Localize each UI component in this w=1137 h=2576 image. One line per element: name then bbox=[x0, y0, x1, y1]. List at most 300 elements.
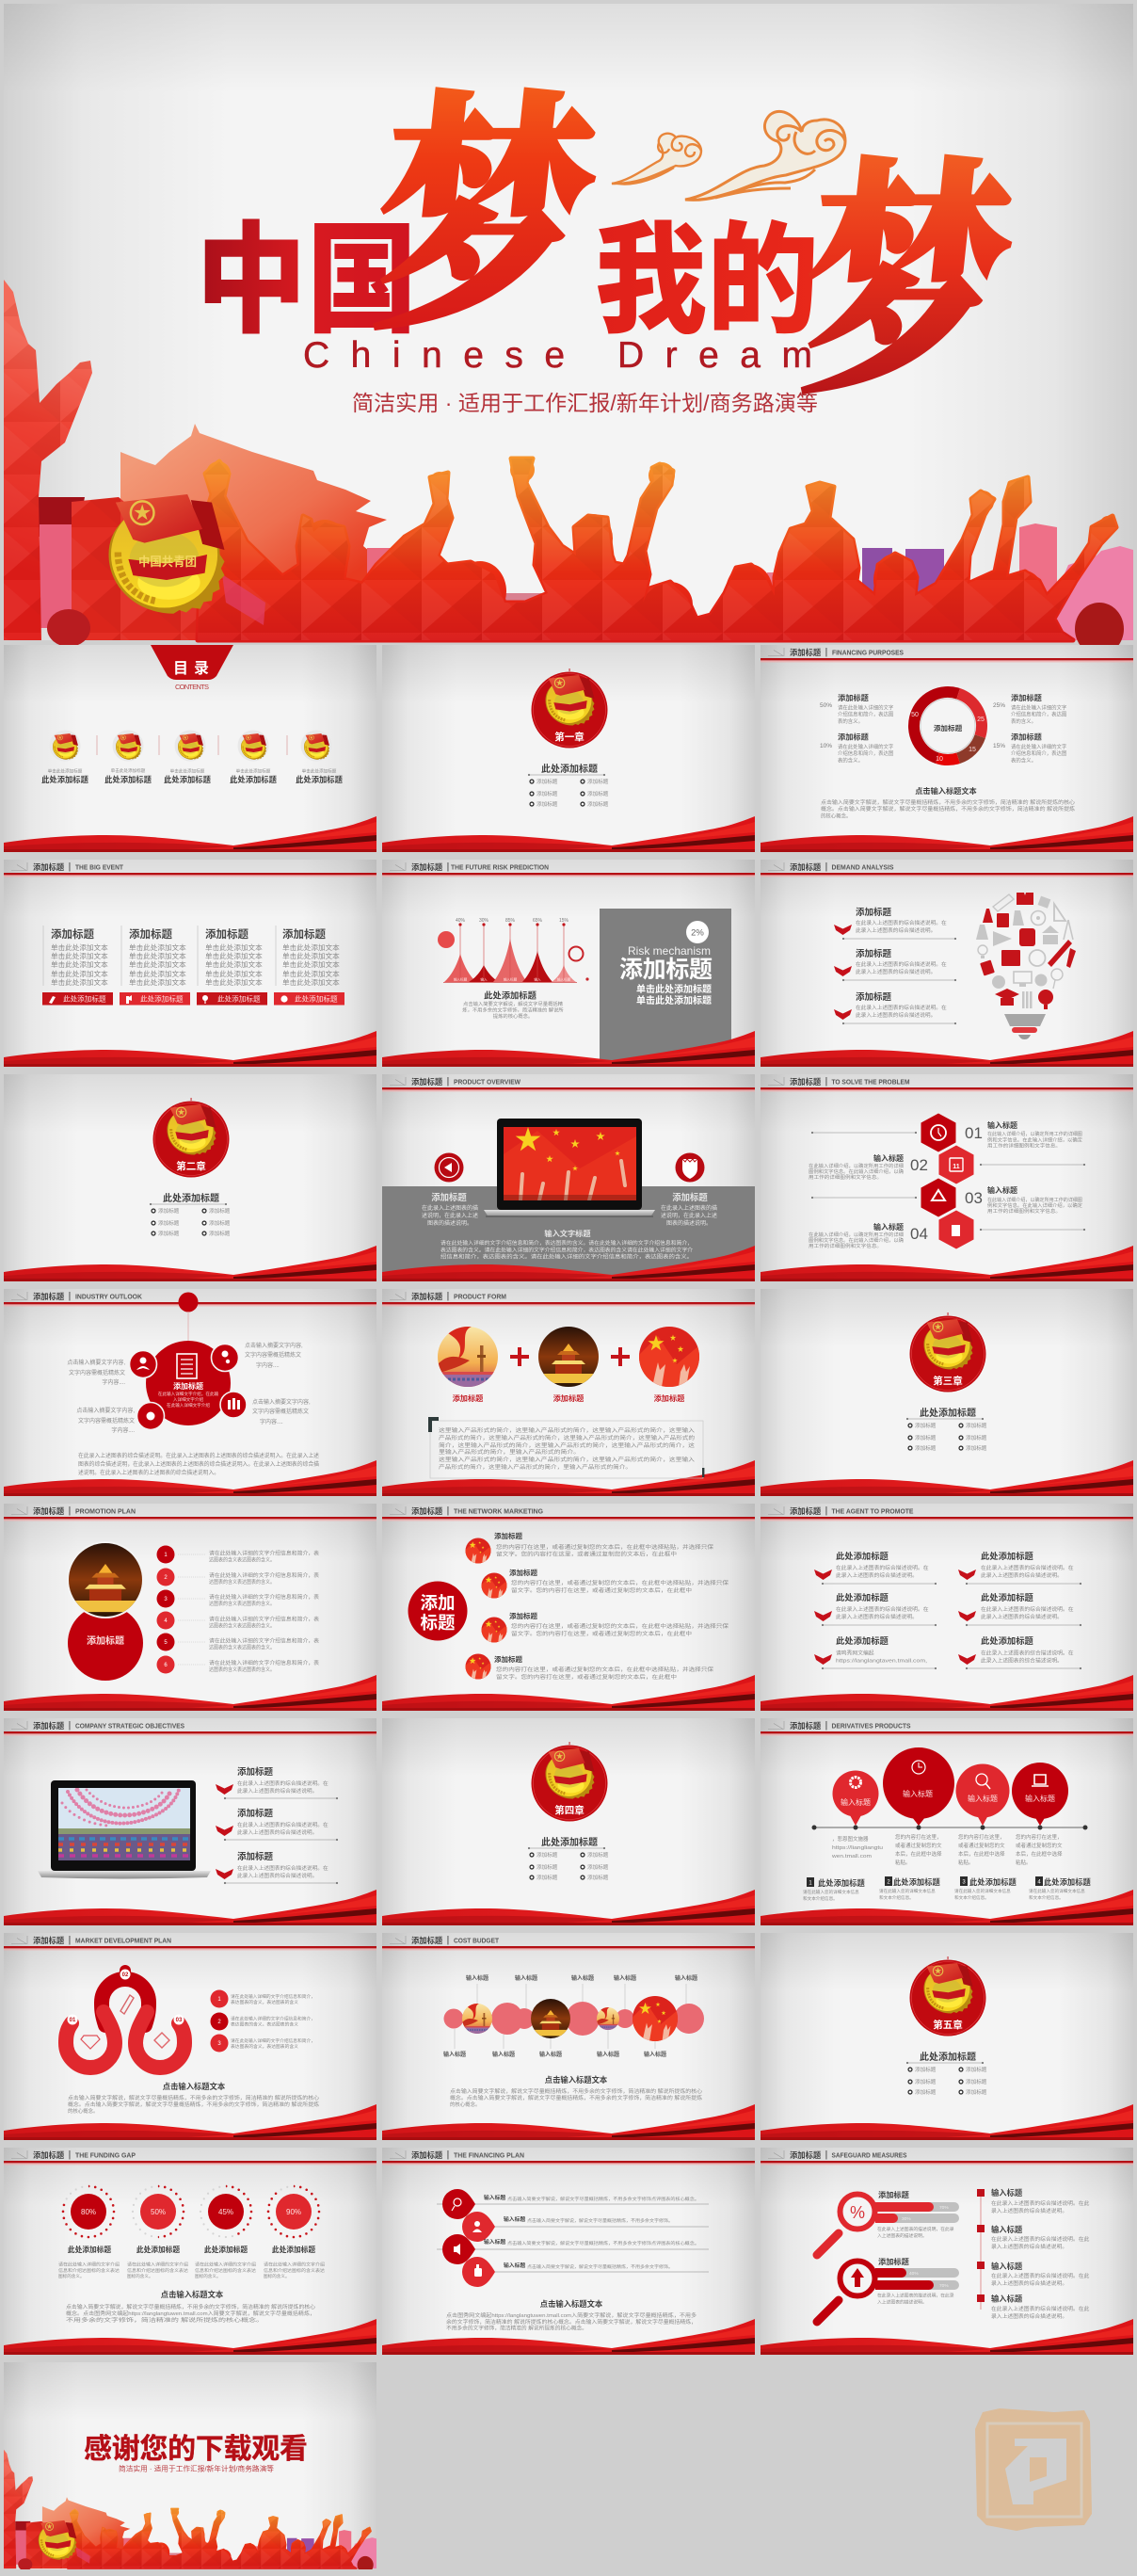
row texts bbox=[484, 2194, 699, 2270]
summary paragraph: 不用多余的文字修饰，简洁精准的 解说所提炼的核心概念。 bbox=[66, 2316, 264, 2324]
four dotted percentage rings: 50% bbox=[151, 2208, 166, 2216]
ring captions: 信息和介绍达图标的含义表达 bbox=[195, 2267, 256, 2274]
chapter text: 添加标题 bbox=[587, 778, 609, 785]
right column list: 在此录入上述图表的综合描述说明。在此 bbox=[991, 2235, 1090, 2243]
bottom paragraph bbox=[78, 1452, 319, 1476]
three numbered notes: 表达图表的含义。表达图表的含义 bbox=[231, 1999, 298, 2005]
panel: the financing plan bbox=[382, 2148, 755, 2355]
photo and red circle bbox=[67, 1541, 144, 1681]
five emblem items bbox=[41, 731, 344, 784]
panel: industry outlook bbox=[4, 1289, 376, 1496]
header: DEMAND ANALYSIS bbox=[832, 864, 894, 872]
text box bbox=[428, 1417, 704, 1478]
text blocks: 添加标题 bbox=[838, 733, 869, 742]
hexagon chain bbox=[921, 1113, 973, 1248]
rows with teardrop icons bbox=[437, 2189, 709, 2287]
four text columns: 添加标题 bbox=[205, 927, 248, 941]
four red buttons: 此处添加标题 bbox=[217, 994, 261, 1004]
five emblem items: 单击此处添加标题 bbox=[111, 767, 146, 774]
summary paragraph bbox=[66, 2290, 316, 2324]
triangle chart: 30% bbox=[479, 918, 489, 924]
chart caption: 提炼的核心概念。 bbox=[493, 1012, 533, 1020]
row texts: 输入标题 bbox=[504, 2262, 525, 2269]
grey side panel: Risk mechanism bbox=[628, 944, 711, 958]
right column list: 录入上述图表的综合描述说明。 bbox=[991, 2279, 1067, 2287]
right column list: 输入标题 bbox=[991, 2225, 1023, 2234]
photo and red circle: 添加标题 bbox=[87, 1634, 124, 1647]
magnifier one with bars: 在此录入上述图表的描述说明，在此录 bbox=[877, 2226, 954, 2232]
chart caption: 点击输入简要文字解说，解说文字尽量概括精 bbox=[463, 1000, 564, 1007]
text blocks: 在此输入详细介绍，以确定所用工作的详细图 bbox=[987, 1131, 1082, 1137]
summary paragraph bbox=[821, 786, 1076, 819]
four text columns: 添加标题 bbox=[282, 927, 326, 941]
item texts: 您的内容打在这里，或者通过复制您的文本后，在此框中选择粘贴，并选择只保 bbox=[511, 1622, 729, 1630]
three list items: 在此录入上述图表的综合描述说明。在 bbox=[856, 919, 947, 926]
bottom paragraph: 图表的综合描述说明，在此录入上述图表的上述图表的综合描述说明入。在此录入上述图表的综合描 bbox=[78, 1460, 319, 1468]
panel: product form bbox=[382, 1289, 755, 1496]
text blocks: 表的含义。 bbox=[838, 757, 863, 765]
satellite texts: 点击输入摘要文字内容, bbox=[76, 1407, 135, 1414]
crowd and tiananmen silhouette bbox=[4, 280, 1133, 655]
summary paragraph: 点击输入标题文本 bbox=[545, 2075, 608, 2085]
text blocks: 图例和文字信息。在此输入详细介绍，以确 bbox=[809, 1168, 904, 1175]
ring captions: 请在此处输入详细的文字介绍 bbox=[58, 2262, 120, 2267]
large circle heading: 标题 bbox=[420, 1613, 456, 1633]
four text columns: 单击此处添加文本 bbox=[282, 951, 340, 960]
header bbox=[411, 862, 549, 872]
item texts: 留文字。您的内容打在这里，或者通过复制您的文本后，在此框中 bbox=[511, 1630, 692, 1637]
five emblem items: 单击此处添加标题 bbox=[236, 768, 271, 774]
text blocks: 表的含义。 bbox=[1011, 717, 1036, 725]
icon: watermark stamp bbox=[975, 2408, 1092, 2531]
side texts bbox=[422, 1192, 717, 1227]
right column list: 输入标题 bbox=[991, 2294, 1023, 2303]
circle labels: 输入标题 bbox=[466, 1974, 488, 1982]
laptop with flag photo bbox=[484, 1119, 655, 1217]
four text columns: 添加标题 bbox=[129, 927, 172, 941]
four numbered notes: 和文本介绍信息。 bbox=[803, 1895, 838, 1902]
header bbox=[790, 2150, 907, 2160]
numbered list: 请在此处输入详细的文字介绍信息和简介，表 bbox=[209, 1636, 319, 1644]
panel: network marketing bbox=[382, 1504, 755, 1711]
text blocks: 输入标题 bbox=[873, 1222, 904, 1232]
tagline: 简洁实用 · 适用于工作汇报/新年计划/商务路演等 bbox=[352, 391, 818, 415]
icon: light bulb of icons bbox=[976, 893, 1076, 1039]
numbered list: 5 bbox=[164, 1640, 168, 1646]
connector lines bbox=[812, 1133, 1084, 1230]
ring captions: 此处添加标题 bbox=[272, 2245, 315, 2254]
icon: right circle bbox=[676, 1152, 704, 1183]
four text columns: 单击此处添加文本 bbox=[282, 977, 340, 987]
three list items: 添加标题 bbox=[237, 1766, 274, 1778]
row texts: 点击输入简要文字解说，解说文字尽量概括精炼，不用多余文字修饰。 bbox=[527, 2263, 673, 2270]
numbers: 02 bbox=[910, 1156, 928, 1174]
side texts: 在此录入上述图表的描 bbox=[661, 1204, 717, 1212]
chapter text: 第三章 bbox=[933, 1375, 963, 1387]
title: 梦 second calligraphy: 梦 bbox=[788, 84, 1031, 440]
summary paragraph: 点击输入标题文本 bbox=[540, 2299, 603, 2309]
row texts: 点击输入简要文字解说，解说文字尽量概括精炼，不用多余文字修饰点评图表的核心概念。 bbox=[507, 2240, 699, 2246]
chapter text bbox=[536, 1804, 609, 1881]
satellite texts: 字内容.... bbox=[111, 1426, 135, 1434]
four red buttons bbox=[42, 992, 344, 1006]
summary paragraph: 不用多余的文字修饰，简洁精准的 解说所提炼的核心概念。 bbox=[446, 2324, 587, 2331]
three photo circles with plus signs: 添加标题 bbox=[553, 1393, 584, 1403]
panel: chapter four bbox=[382, 1718, 755, 1925]
row texts: 点击输入简要文字解说，解说文字尽量概括精炼，不用多余文字修饰。 bbox=[527, 2217, 673, 2224]
chapter text: 添加标题 bbox=[915, 2088, 937, 2096]
triangle chart: 40% bbox=[456, 918, 466, 924]
header: 添加标题 bbox=[33, 2150, 65, 2160]
timeline captions: 粘贴。 bbox=[958, 1859, 974, 1866]
summary paragraph: 的核心概念。 bbox=[450, 2101, 480, 2108]
panel: to solve the problem bbox=[761, 1074, 1133, 1281]
centre text: 绍信息和简介，表达图表的含义。请在此处输入详细的文字介绍信息和简介，表达图表的含义。 bbox=[440, 1252, 693, 1260]
contents banner: 目录 bbox=[173, 660, 209, 677]
six list items: 在此录入上述图表的综合描述说明。在 bbox=[981, 1605, 1074, 1613]
four numbered notes: 3 bbox=[962, 1879, 966, 1885]
text blocks: 输入标题 bbox=[987, 1120, 1017, 1130]
panel: product overview bbox=[382, 1074, 755, 1281]
chapter text bbox=[915, 1375, 987, 1452]
header bbox=[411, 2150, 524, 2160]
header: THE FUTURE RISK PREDICTION bbox=[451, 864, 549, 872]
text blocks: 在此输入详细介绍，以确定所用工作的详细图 bbox=[987, 1197, 1082, 1203]
ring captions bbox=[58, 2245, 325, 2279]
central bubble diagram: 添加标题 bbox=[173, 1381, 203, 1391]
right column list: 在此录入上述图表的综合描述说明。在此 bbox=[991, 2272, 1090, 2279]
magnifier one with bars: 70% bbox=[939, 2205, 949, 2211]
ring captions: 信息和介绍达图标的含义表达 bbox=[264, 2267, 325, 2274]
three list items: 添加标题 bbox=[856, 907, 892, 918]
four text columns: 单击此处添加文本 bbox=[205, 977, 263, 987]
three photo circles with plus signs bbox=[438, 1327, 699, 1403]
five emblem items: 此处添加标题 bbox=[104, 775, 152, 784]
right column list: 录入上述图表的综合描述说明。 bbox=[991, 2312, 1067, 2320]
four dotted percentage rings: 45% bbox=[218, 2208, 233, 2216]
text blocks: 添加标题 bbox=[1011, 733, 1042, 742]
text blocks: 表的含义。 bbox=[838, 717, 863, 725]
circle labels: 输入标题 bbox=[614, 1974, 636, 1982]
circle labels: 输入标题 bbox=[539, 2051, 562, 2058]
chapter text: 添加标题 bbox=[966, 2066, 987, 2073]
numbered list: 请在此处输入详细的文字介绍信息和简介，表 bbox=[209, 1659, 319, 1666]
right column list bbox=[977, 2188, 1090, 2320]
title: 中国: 中国 bbox=[196, 215, 417, 348]
icon: youth league emblem: 中国共青团 bbox=[138, 555, 197, 569]
panel: the big event bbox=[4, 860, 376, 1067]
five emblem items: 此处添加标题 bbox=[164, 775, 212, 784]
header: 添加标题 bbox=[33, 862, 65, 872]
header: THE NETWORK MARKETING bbox=[454, 1508, 544, 1516]
triangle chart: 输入 bbox=[480, 977, 488, 981]
thank you tagline: 简洁实用 · 适用于工作汇报/新年计划/商务路演等 bbox=[119, 2465, 274, 2472]
large circle heading bbox=[408, 1582, 467, 1640]
five emblem items: 单击此处添加标题 bbox=[302, 768, 337, 774]
item texts: 您的内容打在这里，或者通过复制您的文本后，在此框中选择粘贴，并选择只保 bbox=[511, 1579, 729, 1586]
six list items: 此录入上述图表的综合描述说明。 bbox=[836, 1571, 918, 1579]
summary paragraph: 点击图秀网文编起https://langlangtuwen.tmall.com入简要文字解说，解说文字尽量概括精炼，不用多 bbox=[446, 2311, 697, 2319]
four text columns: 单击此处添加文本 bbox=[205, 959, 263, 969]
numbers: 03 bbox=[965, 1189, 983, 1207]
text blocks: 例和文字信息。在此输入详细介绍，以确定 bbox=[987, 1202, 1082, 1209]
ring captions: 图标的含义。 bbox=[127, 2273, 153, 2279]
side texts: 在此录入上述图表的描 bbox=[422, 1204, 478, 1212]
four numbered notes: 此处添加标题 bbox=[969, 1877, 1017, 1887]
numbered list: 2 bbox=[164, 1575, 168, 1581]
photo bullets bbox=[465, 1538, 506, 1680]
triangle chart: 输入 bbox=[534, 977, 541, 981]
donut chart: 添加标题 bbox=[934, 723, 963, 733]
satellite texts: 字内容.... bbox=[260, 1418, 283, 1425]
central bubble diagram bbox=[130, 1292, 247, 1429]
text box: 产品形式的简介，这里输入产品形式的简介，里输入产品形式的简介。 bbox=[439, 1463, 632, 1471]
four text columns: 单击此处添加文本 bbox=[129, 951, 186, 960]
three numbered notes: 请在此处输入详细的文字介绍信息和简介， bbox=[231, 1993, 315, 2000]
ring captions: 请在此处输入详细的文字介绍 bbox=[195, 2262, 256, 2267]
right column list: 输入标题 bbox=[991, 2188, 1023, 2198]
five emblem items: 单击此处添加标题 bbox=[170, 768, 205, 774]
panel: derivatives products bbox=[761, 1718, 1133, 1925]
contents banner bbox=[151, 645, 233, 691]
header: 添加标题 bbox=[33, 1721, 65, 1731]
header: THE BIG EVENT bbox=[75, 864, 124, 872]
chapter text: 添加标题 bbox=[209, 1219, 231, 1227]
text blocks: 用工作的详细图例和文字信息。 bbox=[809, 1174, 882, 1181]
text box: 这里输入产品形式的简介，这里输入产品形式的简介，这里输入产品形式的简介，这里输入 bbox=[439, 1456, 695, 1463]
four text columns: 单击此处添加文本 bbox=[51, 942, 108, 952]
magnifier one with bars: % bbox=[850, 2203, 865, 2222]
donut chart: 50 bbox=[911, 712, 919, 718]
balloon pins: 输入标题 bbox=[903, 1789, 933, 1798]
four red buttons: 此处添加标题 bbox=[295, 994, 338, 1004]
chapter text: 添加标题 bbox=[587, 1874, 609, 1881]
three list items: 添加标题 bbox=[237, 1808, 274, 1819]
row texts: 输入标题 bbox=[484, 2194, 505, 2201]
numbered list: 达图表的含义表达图表的含义。 bbox=[209, 1555, 275, 1563]
circle labels: 输入标题 bbox=[571, 1974, 594, 1982]
side texts: 添加标题 bbox=[672, 1192, 708, 1202]
five emblem items: 单击此处添加标题 bbox=[48, 768, 83, 774]
three list items: 此录入上述图表的综合描述说明。 bbox=[237, 1872, 317, 1879]
summary paragraph: 点击输入简要文字解说，解说文字尽量概括精炼，不用多余的文字修饰，简洁精准的 解说所提炼的核心 bbox=[821, 798, 1076, 806]
hero cover slide bbox=[4, 4, 1133, 655]
central bubble diagram: 在此输入详细文字介绍，在此输 bbox=[158, 1391, 219, 1397]
header bbox=[411, 1077, 520, 1087]
chapter text: 添加标题 bbox=[536, 778, 558, 785]
chapter text: 添加标题 bbox=[536, 790, 558, 797]
chapter text: 添加标题 bbox=[966, 1434, 987, 1441]
chapter text: 添加标题 bbox=[966, 2088, 987, 2096]
four dotted percentage rings: 90% bbox=[286, 2208, 301, 2216]
magnifier two with bars: 40% bbox=[909, 2271, 919, 2277]
magnifier one with bars: 30% bbox=[902, 2216, 911, 2222]
text blocks: 请在此处输入详细的文字 bbox=[838, 704, 893, 712]
circle labels: 输入标题 bbox=[443, 2051, 466, 2058]
header bbox=[790, 648, 904, 657]
row texts: 输入标题 bbox=[504, 2215, 525, 2223]
ring captions: 图标的含义。 bbox=[264, 2273, 290, 2279]
chapter text: 添加标题 bbox=[587, 1851, 609, 1859]
chapter text: 添加标题 bbox=[915, 1434, 937, 1441]
four text columns: 单击此处添加文本 bbox=[129, 977, 186, 987]
balloon pins: 输入标题 bbox=[968, 1794, 998, 1803]
header: 添加标题 bbox=[411, 1077, 443, 1087]
numbered list: 3 bbox=[164, 1597, 168, 1602]
chart caption: 炼，不用多余的文字修饰，简洁精准的 解说所 bbox=[462, 1006, 564, 1013]
four numbered notes: 请在此输入您的详细文本信息 bbox=[803, 1889, 859, 1895]
summary paragraph: 点击输入简要文字解说，解说文字尽量概括精炼，不用多余的文字修饰，简洁精准的 解说所提炼的核心 bbox=[450, 2087, 703, 2095]
chart caption bbox=[462, 990, 564, 1020]
panel: contents slide bbox=[4, 645, 376, 852]
panel: market development plan bbox=[4, 1933, 376, 2140]
four numbered notes: 和文本介绍信息。 bbox=[1029, 1894, 1064, 1901]
panel: the agent to promote bbox=[761, 1504, 1133, 1711]
interlocking loop diagram: 01 bbox=[70, 2018, 76, 2023]
chapter text: 添加标题 bbox=[915, 1444, 937, 1452]
panel: thank you slide bbox=[4, 2362, 376, 2573]
numbered list bbox=[156, 1546, 319, 1674]
header bbox=[33, 862, 124, 872]
four dotted percentage rings: 80% bbox=[81, 2208, 96, 2216]
laptop with festival photo bbox=[38, 1780, 211, 1879]
header bbox=[790, 1506, 914, 1516]
text blocks: 添加标题 bbox=[1011, 693, 1042, 702]
magnifier two with bars: 70% bbox=[939, 2283, 949, 2289]
text box: 里输入产品形式的简介，里输入产品形式的简介。 bbox=[439, 1448, 580, 1456]
text blocks: 用工作的详细图例和文字信息。 bbox=[987, 1208, 1061, 1215]
right column list: 在此录入上述图表的综合描述说明。在此 bbox=[991, 2305, 1090, 2312]
item texts: 留文字。您的内容打在这里，或者通过复制您的文本后，在此框中 bbox=[496, 1550, 677, 1557]
satellite texts: 字内容.... bbox=[102, 1378, 125, 1386]
header: PRODUCT OVERVIEW bbox=[454, 1079, 520, 1087]
chapter text: 添加标题 bbox=[966, 2078, 987, 2085]
four numbered notes: 此处添加标题 bbox=[893, 1877, 940, 1887]
text box: 这里输入产品形式的简介，这里输入产品形式的简介，这里输入产品形式的简介，这里输入 bbox=[439, 1426, 695, 1434]
header: PRODUCT FORM bbox=[454, 1294, 506, 1301]
timeline captions: 或者通过复制您的文 bbox=[895, 1842, 942, 1849]
summary paragraph: 的核心概念。 bbox=[68, 2107, 98, 2115]
centre text: 表达图表的含义。请在此处输入详细的文字介绍信息和简介，表达图表的含义请在此处输入详细的文字介 bbox=[440, 1247, 693, 1254]
numbered list: 请在此处输入详细的文字介绍信息和简介，表 bbox=[209, 1571, 319, 1579]
three list items: 此录入上述图表的综合描述说明。 bbox=[856, 926, 936, 934]
three list items: 此录入上述图表的综合描述说明。 bbox=[856, 968, 936, 975]
right column list: 录入上述图表的综合描述说明。 bbox=[991, 2243, 1067, 2250]
circle labels: 输入标题 bbox=[675, 1974, 697, 1982]
four numbered notes: 2 bbox=[887, 1879, 890, 1885]
numbers: 04 bbox=[910, 1225, 928, 1243]
magnifier two with bars: 在此录入上述图表的描述说明，在此录 bbox=[877, 2292, 954, 2299]
summary paragraph: 点击输入标题文本 bbox=[915, 786, 977, 796]
three numbered notes: 2 bbox=[217, 2020, 221, 2025]
triangle chart bbox=[438, 918, 589, 983]
text blocks: 在此输入详细介绍，以确定所用工作的详细 bbox=[809, 1163, 904, 1169]
five emblem items: 此处添加标题 bbox=[296, 775, 344, 784]
summary paragraph bbox=[446, 2299, 697, 2331]
circle labels: 输入标题 bbox=[515, 1974, 537, 1982]
panel: chapter one bbox=[382, 645, 755, 852]
triangle chart: 输入标题 bbox=[557, 977, 571, 981]
summary paragraph: 概念。点击图秀网文编起https://langlangtuwen.tmall.com入简要文字解说，解说文字尽量概括精炼， bbox=[66, 2310, 315, 2317]
panel: chapter five bbox=[761, 1933, 1133, 2140]
chapter text: 添加标题 bbox=[915, 2078, 937, 2085]
four numbered notes: 此处添加标题 bbox=[1044, 1877, 1091, 1887]
text blocks: 在此输入详细介绍，以确定所用工作的详细 bbox=[809, 1232, 904, 1238]
three numbered notes: 3 bbox=[217, 2041, 221, 2047]
text blocks: 图例和文字信息。在此输入详细介绍，以确 bbox=[809, 1237, 904, 1244]
header: INDUSTRY OUTLOOK bbox=[75, 1294, 142, 1301]
four numbered notes: 1 bbox=[809, 1881, 812, 1887]
header bbox=[790, 862, 894, 872]
item texts: 您的内容打在这里，或者通过复制您的文本后，在此框中选择粘贴，并选择只保 bbox=[496, 1543, 713, 1551]
chapter text: 此处添加标题 bbox=[920, 2051, 976, 2063]
four numbered notes: 请在此输入您的详细文本信息 bbox=[1029, 1888, 1085, 1894]
three list items bbox=[834, 907, 955, 1023]
header: PROMOTION PLAN bbox=[75, 1508, 136, 1516]
header bbox=[33, 1506, 136, 1516]
header: 添加标题 bbox=[790, 862, 822, 872]
subtitle: Chinese Dream: Chinese Dream bbox=[303, 335, 812, 376]
header: 添加标题 bbox=[790, 1077, 822, 1087]
summary paragraph: 的核心概念。 bbox=[821, 812, 851, 819]
header: SAFEGUARD MEASURES bbox=[832, 2152, 907, 2160]
chapter text: 添加标题 bbox=[587, 790, 609, 797]
satellite texts: 点击输入摘要文字内容, bbox=[245, 1342, 303, 1349]
ring captions: 信息和介绍达图标的含义表达 bbox=[58, 2267, 120, 2274]
text blocks: 15% bbox=[993, 743, 1005, 749]
header: 添加标题 bbox=[411, 862, 443, 872]
summary paragraph bbox=[68, 2082, 320, 2115]
six list items: 在此录入上述图表的综合描述说明。在 bbox=[981, 1564, 1074, 1571]
header: MARKET DEVELOPMENT PLAN bbox=[75, 1938, 171, 1945]
header: 添加标题 bbox=[790, 648, 822, 657]
chapter text: 添加标题 bbox=[915, 1422, 937, 1429]
ring captions: 请在此处输入详细的文字介绍 bbox=[127, 2262, 188, 2267]
ring captions: 信息和介绍达图标的含义表达 bbox=[127, 2267, 188, 2274]
magnifier two with bars: 入上述图表的描述说明。 bbox=[877, 2299, 927, 2305]
header bbox=[411, 1506, 544, 1516]
row texts: 点击输入简要文字解说，解说文字尽量概括精炼，不用多余文字修饰点评图表的核心概念。 bbox=[507, 2196, 699, 2202]
six list items: 此录入上述图表的综合描述说明。 bbox=[836, 1613, 918, 1620]
ring captions: 此处添加标题 bbox=[136, 2245, 180, 2254]
timeline captions: 本后，在此框中选择 bbox=[958, 1850, 1005, 1858]
panel: the funding gap bbox=[4, 2148, 376, 2355]
six list items: 此处添加标题 bbox=[981, 1592, 1033, 1602]
summary paragraph: 概念。点击输入简要文字解说，解说文字尽量概括精炼，不用多余的文字修饰，简洁精准的 解说所提炼 bbox=[450, 2094, 703, 2101]
header: 添加标题 bbox=[411, 1292, 443, 1301]
header bbox=[411, 1936, 500, 1945]
four red buttons: 此处添加标题 bbox=[140, 994, 184, 1004]
timeline captions: 粘贴。 bbox=[895, 1859, 911, 1866]
four text columns: 单击此处添加文本 bbox=[282, 942, 340, 952]
three list items: 此录入上述图表的综合描述说明。 bbox=[856, 1011, 936, 1019]
grey side panel: 2% bbox=[691, 928, 704, 938]
text blocks: 25% bbox=[993, 702, 1005, 709]
numbered list: 6 bbox=[164, 1663, 168, 1668]
six list items: 此录入上述图表的综合描述说明。 bbox=[981, 1613, 1063, 1620]
text blocks: 请在此处输入详细的文字 bbox=[838, 743, 893, 750]
timeline captions: wen.tmall.com bbox=[831, 1854, 872, 1860]
three numbered notes: 1 bbox=[217, 1997, 221, 2003]
text blocks: 例和文字信息。在此输入详细介绍，以确定 bbox=[987, 1137, 1082, 1143]
four text columns: 单击此处添加文本 bbox=[129, 969, 186, 978]
panel: chapter two bbox=[4, 1074, 376, 1281]
chapter text: 添加标题 bbox=[158, 1230, 180, 1237]
chapter text: 此处添加标题 bbox=[541, 763, 598, 775]
four text columns: 单击此处添加文本 bbox=[282, 969, 340, 978]
text blocks: 添加标题 bbox=[838, 693, 869, 702]
donut chart: 10 bbox=[936, 756, 943, 763]
